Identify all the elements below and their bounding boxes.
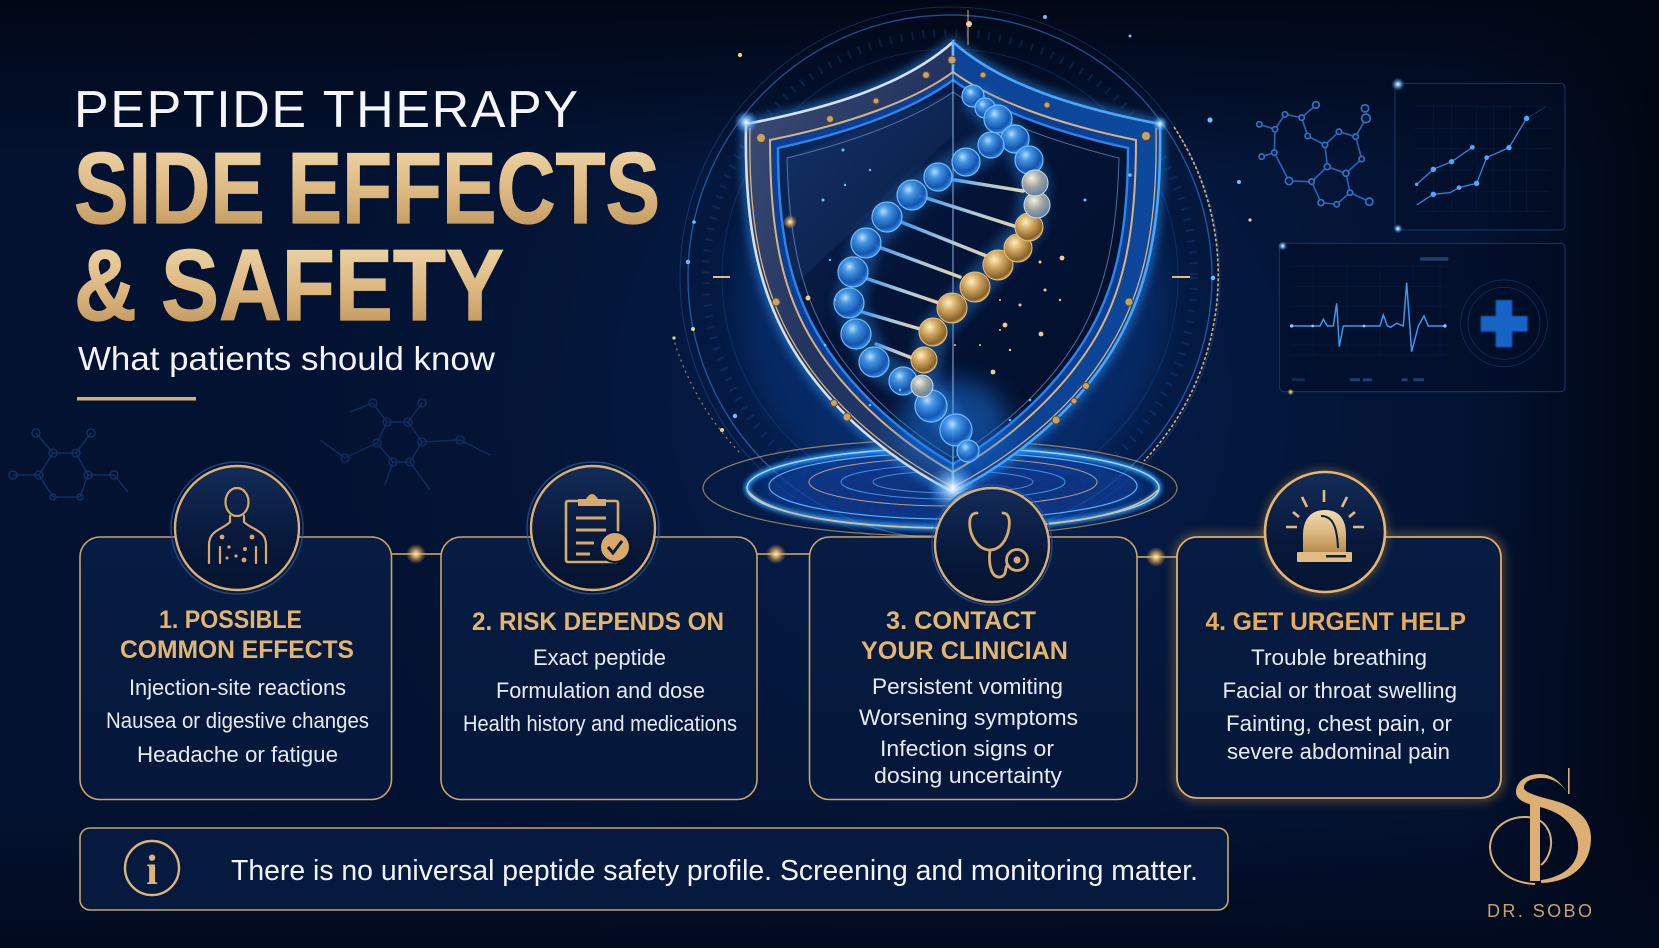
card 1 icon badge xyxy=(171,462,303,594)
card 1 list: Injection-site reactions xyxy=(129,675,346,700)
sparkles xyxy=(672,15,1252,514)
icon: info xyxy=(125,841,179,895)
card 2 heading: 2. RISK DEPENDS ON xyxy=(472,608,724,636)
molecule diagram upper right xyxy=(1257,102,1373,207)
dna helix xyxy=(834,85,1050,462)
card 1 list: Nausea or digestive changes xyxy=(106,708,369,733)
title block xyxy=(74,81,660,400)
dna strand pale xyxy=(911,170,1050,397)
card 4: get urgent help xyxy=(1177,470,1501,798)
heading line: SIDE EFFECTS: SIDE EFFECTS xyxy=(74,133,660,245)
dr. sobo logo xyxy=(1487,768,1592,921)
card 3 icon badge xyxy=(932,485,1052,605)
card 1 list xyxy=(106,675,369,767)
faint molecule left xyxy=(9,429,128,500)
card 4 list: severe abdominal pain xyxy=(1227,739,1450,764)
shield rim left xyxy=(746,42,953,492)
connector lines xyxy=(391,554,1177,557)
subtitle: What patients should know xyxy=(78,340,495,377)
line chart panel xyxy=(1391,78,1565,233)
shield inner panel xyxy=(770,72,1136,472)
card 3 heading: 3. CONTACT xyxy=(886,607,1036,635)
card 2 list: Health history and medications xyxy=(463,711,737,736)
card 4 list: Fainting, chest pain, or xyxy=(1226,711,1452,736)
dna strand blue xyxy=(834,85,1043,462)
card 4 icon badge xyxy=(1263,470,1387,594)
card 2: risk depends on xyxy=(441,462,757,800)
card 1 heading: COMMON EFFECTS xyxy=(120,636,354,664)
ecg panel xyxy=(1278,241,1565,395)
connector dots xyxy=(406,544,1166,567)
card 3: contact your clinician xyxy=(810,485,1137,800)
shield xyxy=(746,42,1160,492)
card 3 list: Worsening symptoms xyxy=(859,705,1078,730)
card 3 heading: YOUR CLINICIAN xyxy=(861,637,1068,665)
card 1 heading: 1. POSSIBLE xyxy=(159,606,302,634)
heading line: & SAFETY: & SAFETY xyxy=(74,230,504,342)
card 3 list: Infection signs or xyxy=(880,736,1054,761)
card 1: possible common effects xyxy=(80,462,392,800)
dna rungs xyxy=(862,179,1023,358)
faint molecule centre-left xyxy=(320,399,490,490)
card 2 list: Exact peptide xyxy=(533,645,666,670)
card 3 panel xyxy=(810,537,1137,800)
banner text: There is no universal peptide safety profile. Screening and monitoring matter. xyxy=(231,855,1198,887)
title underline xyxy=(77,397,196,400)
card 4 heading: 4. GET URGENT HELP xyxy=(1206,608,1466,636)
logo wordmark: DR. SOBO xyxy=(1487,901,1592,921)
medical cross xyxy=(1481,300,1528,347)
heading line: PEPTIDE THERAPY: PEPTIDE THERAPY xyxy=(74,81,578,139)
dna strand gold xyxy=(911,213,1043,373)
safety note banner xyxy=(80,828,1228,910)
card 2 list xyxy=(463,645,737,736)
card 3 list xyxy=(859,674,1078,788)
card 2 panel xyxy=(441,537,757,800)
card 2 list: Formulation and dose xyxy=(496,678,705,703)
shield rim right xyxy=(953,42,1160,492)
card 2 icon badge xyxy=(527,462,659,594)
glow behind shield xyxy=(738,90,1168,510)
glowing platform xyxy=(703,440,1177,536)
card 4 list: Facial or throat swelling xyxy=(1222,678,1457,703)
card 4 list: Trouble breathing xyxy=(1251,645,1427,670)
card 1 list: Headache or fatigue xyxy=(137,742,338,767)
icon: info: i xyxy=(146,848,158,894)
card 4 panel xyxy=(1177,537,1501,798)
card 4 list xyxy=(1222,645,1457,764)
card 3 list: Persistent vomiting xyxy=(872,674,1063,699)
logo monogram emblem xyxy=(1490,768,1591,884)
card 3 list: dosing uncertainty xyxy=(874,763,1062,788)
banner panel xyxy=(80,828,1228,910)
card 1 panel xyxy=(80,537,392,800)
shield rivets xyxy=(756,56,1150,424)
hud rings around shield xyxy=(673,7,1220,547)
